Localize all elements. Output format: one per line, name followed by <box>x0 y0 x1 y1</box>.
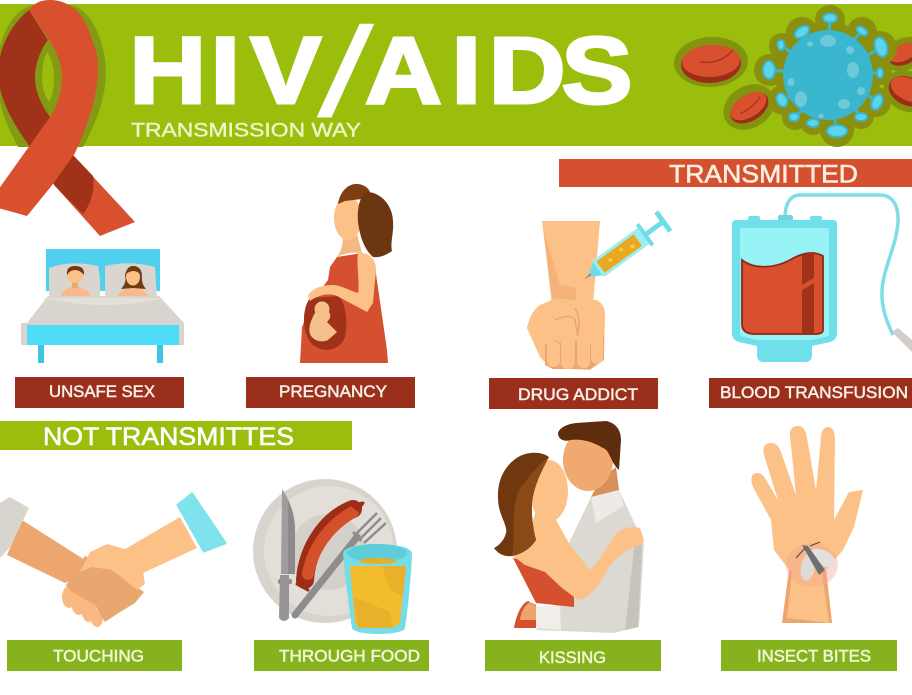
man's neck <box>591 467 619 497</box>
heading: not transmittes: NOT TRANSMITTES <box>43 423 294 451</box>
ponytail <box>358 192 393 257</box>
title: HIV <box>129 18 321 124</box>
label: unsafe sex <box>15 377 184 408</box>
hair <box>338 184 370 204</box>
glass <box>343 544 412 634</box>
icon: pregnant woman <box>300 184 393 363</box>
icon: blood bag <box>732 195 912 362</box>
ribbon front <box>0 0 98 216</box>
icon: red blood cell 1 <box>673 35 749 89</box>
man's shirt <box>536 490 644 633</box>
icon: handshake <box>0 494 225 627</box>
icon: red blood cell 2 <box>715 75 783 139</box>
neck <box>337 230 362 257</box>
lower hand and cuff <box>514 601 536 628</box>
fist <box>527 300 605 370</box>
bag <box>748 216 760 224</box>
man's hair <box>558 421 621 470</box>
label: kissing <box>485 640 661 671</box>
heading: transmitted <box>559 159 912 188</box>
heading: transmitted: TRANSMITTED <box>669 160 858 188</box>
title <box>129 2 632 143</box>
ribbon dark back <box>0 10 93 214</box>
tube <box>785 195 898 335</box>
title: / <box>309 2 381 143</box>
man in bed <box>60 266 92 298</box>
hand <box>751 426 863 623</box>
knife <box>281 489 295 574</box>
insect <box>796 542 839 582</box>
title: AIDS <box>365 18 632 124</box>
sausage <box>305 509 353 580</box>
right arm <box>120 517 197 573</box>
icon: red blood cell 4 <box>877 63 912 120</box>
label: through food <box>254 640 429 671</box>
fingers <box>547 328 603 369</box>
label: pregnancy: PREGNANCY <box>279 383 387 401</box>
ribbon right tail <box>55 155 135 236</box>
fork <box>295 537 357 615</box>
icon: red blood cell 3 <box>878 30 912 78</box>
face <box>334 196 362 240</box>
dress <box>300 253 388 363</box>
fingers <box>62 586 103 627</box>
label: touching: TOUCHING <box>53 648 144 666</box>
forearm <box>542 221 600 305</box>
label: touching <box>7 640 182 671</box>
label: blood transfusion: BLOOD TRANSFUSION <box>720 384 908 402</box>
label: unsafe sex: UNSAFE SEX <box>49 383 155 401</box>
virus surface spots <box>788 35 865 118</box>
left cuff <box>0 497 29 558</box>
label: pregnancy <box>246 377 415 408</box>
woman's dress <box>513 558 584 607</box>
icon: syringe and fist <box>527 210 673 370</box>
icon: hand with insect <box>751 426 863 623</box>
woman's face <box>530 460 568 522</box>
label: insect bites <box>721 640 897 671</box>
left arm <box>7 520 92 583</box>
icon: food and drink <box>253 479 412 634</box>
subtitle: TRANSMISSION WAY <box>131 120 361 142</box>
womb with fetus <box>304 296 346 350</box>
label: kissing: KISSING <box>539 649 606 667</box>
blood <box>742 253 823 334</box>
icon: virus <box>754 5 897 147</box>
woman's hair <box>494 453 549 556</box>
plate <box>253 479 397 623</box>
label: through food: THROUGH FOOD <box>279 648 420 666</box>
ribbon opening <box>35 40 62 117</box>
icon: awareness ribbon <box>0 0 135 236</box>
heading: not transmittes <box>0 421 352 451</box>
syringe <box>576 210 673 290</box>
ribbon shadow <box>0 5 106 147</box>
label: blood transfusion <box>709 378 912 408</box>
man's face <box>563 429 613 491</box>
woman's arm and chest <box>513 510 644 600</box>
virus spikes <box>763 14 889 137</box>
label: drug addict <box>489 378 658 409</box>
bite redness <box>786 543 838 587</box>
label: drug addict: DRUG ADDICT <box>518 386 638 404</box>
label: insect bites: INSECT BITES <box>757 648 871 666</box>
header banner <box>0 2 912 147</box>
upper hand <box>80 544 145 590</box>
woman in bed <box>117 266 149 298</box>
arm and hand <box>308 253 376 312</box>
icon: bed <box>21 249 184 363</box>
lower hand <box>66 556 144 622</box>
right cuff <box>178 494 225 551</box>
icon: embracing couple <box>494 421 644 633</box>
